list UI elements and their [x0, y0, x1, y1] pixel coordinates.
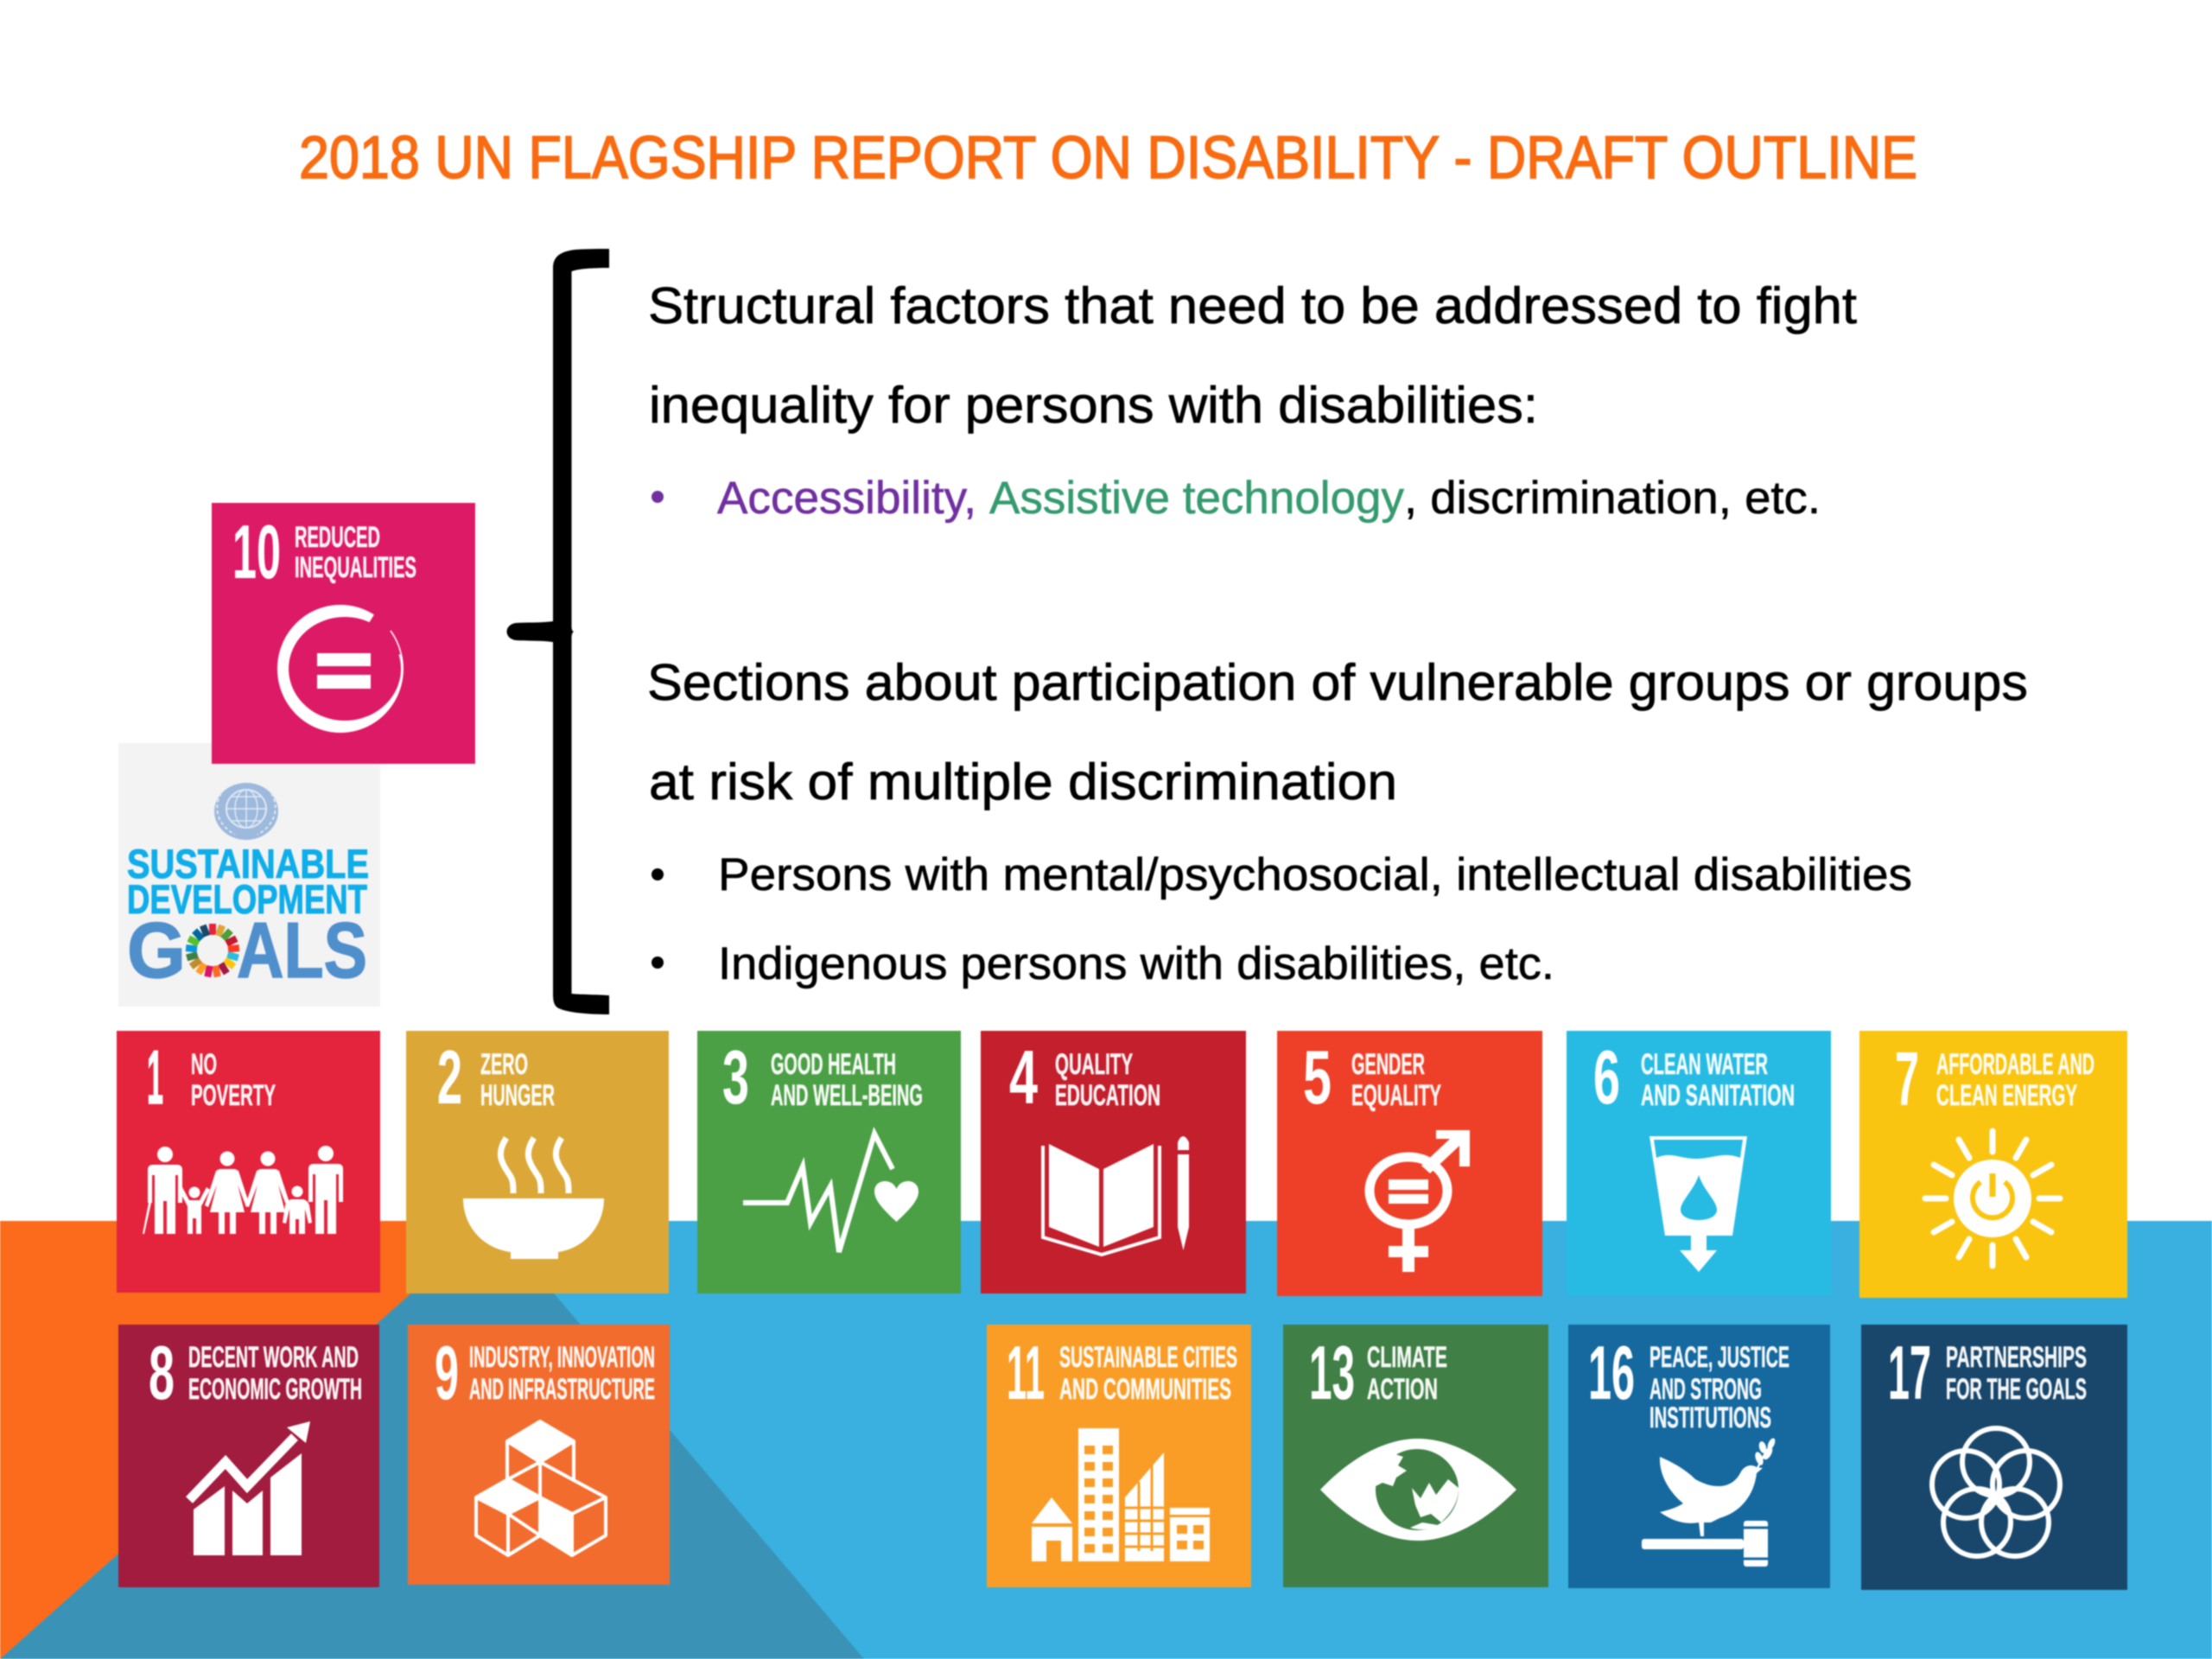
- number: 9: [435, 1330, 459, 1415]
- icon: equality circle: [277, 605, 423, 733]
- label line 2: HUNGER: [480, 1079, 555, 1112]
- label line 1: NO: [191, 1048, 217, 1081]
- tile: goal 1 no poverty: 1: [147, 1034, 163, 1120]
- icon: SDG colour wheel: [186, 924, 239, 977]
- label line 1: INDUSTRY, INNOVATION: [469, 1341, 655, 1374]
- tile: goal 4 quality education: [981, 1031, 1246, 1294]
- label line 2: ECONOMIC GROWTH: [188, 1373, 362, 1406]
- heading: sections: Sections about participation of vulnerable groups or groups: [647, 654, 2028, 711]
- icon: heartbeat: [743, 1134, 918, 1252]
- icon: bowl with steam: [463, 1138, 604, 1259]
- bullet: [652, 491, 664, 503]
- icon: interlocking rings: [1932, 1428, 2060, 1556]
- label line 2: INEQUALITIES: [295, 551, 416, 584]
- logo word: development: DEVELOPMENT: [127, 876, 367, 922]
- icon: sun with power symbol: [1925, 1131, 2060, 1266]
- text block: structural factors: [648, 277, 1857, 524]
- background: coloured bottom band: [0, 1221, 2212, 1659]
- label line 3: INSTITUTIONS: [1649, 1402, 1771, 1434]
- number: 6: [1593, 1034, 1620, 1120]
- icon: book and pencil: [1043, 1136, 1189, 1255]
- list item: persons: Persons with mental/psychosocial, intellectual disabilities: [718, 849, 1912, 900]
- tile: goal 3 good health: [697, 1031, 961, 1294]
- label line 2: EQUALITY: [1351, 1079, 1441, 1112]
- label line 2: AND STRONG: [1649, 1373, 1762, 1406]
- label line 1: QUALITY: [1055, 1048, 1133, 1081]
- tile: goal 17 partnerships: [1861, 1325, 2127, 1590]
- bullet: [652, 868, 664, 880]
- label line 1: REDUCED: [295, 521, 380, 554]
- logo word: sustainable: SUSTAINABLE: [127, 841, 369, 887]
- label line 2: CLEAN ENERGY: [1936, 1079, 2077, 1112]
- label line 1: PEACE, JUSTICE: [1649, 1341, 1789, 1374]
- label line 2: POVERTY: [191, 1079, 276, 1112]
- label line 1: PARTNERSHIPS: [1946, 1341, 2087, 1374]
- number: 5: [1303, 1034, 1332, 1120]
- label line 1: SUSTAINABLE CITIES: [1059, 1341, 1237, 1374]
- number: 2: [437, 1034, 462, 1120]
- icon: city buildings: [1032, 1428, 1210, 1561]
- assistive technology: Assistive technology: [989, 473, 1404, 524]
- number: 7: [1895, 1036, 1919, 1122]
- text block: vulnerable groups: [647, 654, 2028, 989]
- label line 2: AND SANITATION: [1641, 1079, 1795, 1112]
- label line 1: CLIMATE: [1367, 1341, 1447, 1374]
- number: 4: [1009, 1034, 1038, 1120]
- label line 2: FOR THE GOALS: [1946, 1373, 2087, 1406]
- title: 2018 UN FLAGSHIP REPORT ON DISABILITY - DRAFT OUTLINE: [299, 124, 1917, 191]
- label line 1: DECENT WORK AND: [188, 1341, 359, 1374]
- number: 8: [149, 1330, 175, 1415]
- logo: sustainable development goals: [118, 743, 380, 1007]
- tile: goal 9 industry: [408, 1325, 670, 1585]
- label line 1: AFFORDABLE AND: [1936, 1048, 2094, 1081]
- number: 17: [1888, 1330, 1931, 1415]
- heading line 2: inequality for persons with disabilities:: [649, 377, 1538, 434]
- label line 2: ACTION: [1367, 1373, 1438, 1406]
- discrimination etc: , discrimination, etc.: [1404, 473, 1821, 524]
- tile: goal 10 reduced inequalities: [212, 503, 475, 764]
- logo word: G: G: [127, 907, 186, 995]
- tile: goal 7 affordable energy: [1859, 1031, 2127, 1298]
- number: 16: [1588, 1330, 1635, 1415]
- tile: goal 8 decent work: [118, 1325, 379, 1587]
- icon: gender symbol: [1370, 1130, 1470, 1272]
- label line 1: CLEAN WATER: [1641, 1048, 1768, 1081]
- tile: goal 1 no poverty: [117, 1031, 380, 1293]
- icon: growth chart: [189, 1421, 310, 1555]
- label line 2: AND INFRASTRUCTURE: [469, 1373, 655, 1406]
- number: 13: [1309, 1330, 1355, 1415]
- brace: [506, 249, 609, 1014]
- tile: goal 5 gender equality: [1277, 1031, 1542, 1296]
- label line 1: GENDER: [1351, 1048, 1425, 1081]
- tile: goal 16 peace justice: [1568, 1325, 1830, 1588]
- number: 10: [232, 509, 281, 594]
- icon: cubes: [476, 1421, 606, 1555]
- logo word: ALS: ALS: [237, 907, 367, 995]
- bullet: [652, 957, 664, 969]
- tile: goal 11 sustainable cities: 11: [1007, 1330, 1045, 1415]
- tile: goal 2 zero hunger: [406, 1031, 669, 1294]
- icon: glass of water: [1649, 1136, 1747, 1272]
- heading line 2: at risk of multiple discrimination: [649, 753, 1397, 810]
- heading: structural factors: Structural factors that need to be addressed to fight: [648, 277, 1857, 334]
- label line 2: EDUCATION: [1055, 1079, 1160, 1112]
- icon: UN emblem: [214, 783, 278, 840]
- label line 2: AND WELL-BEING: [771, 1079, 923, 1112]
- tile: goal 6 clean water: [1567, 1031, 1831, 1295]
- number: 3: [722, 1034, 749, 1120]
- tile: goal 11 sustainable cities: [987, 1325, 1251, 1587]
- tile: goal 13 climate action: [1283, 1325, 1548, 1587]
- accessibility: Accessibility,: [717, 473, 976, 524]
- icon: eye with globe: [1320, 1439, 1516, 1541]
- label line 2: AND COMMUNITIES: [1059, 1373, 1231, 1406]
- label line 1: GOOD HEALTH: [771, 1048, 896, 1081]
- icon: family: [143, 1146, 343, 1234]
- label line 1: ZERO: [480, 1048, 528, 1081]
- icon: dove and gavel: [1642, 1437, 1777, 1567]
- list item: indigenous: Indigenous persons with disabilities, etc.: [718, 938, 1554, 989]
